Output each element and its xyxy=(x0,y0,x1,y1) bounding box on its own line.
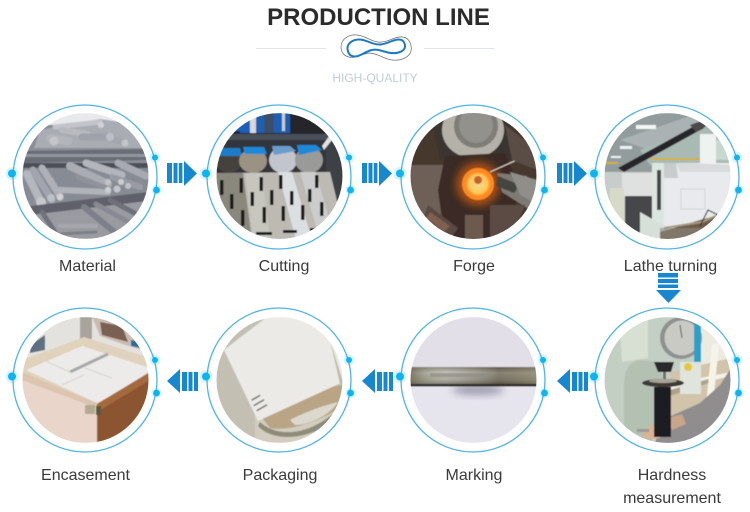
ring xyxy=(401,308,545,452)
label: Encasement xyxy=(41,467,131,484)
photo: wooden crate xyxy=(22,317,150,443)
connector dots xyxy=(200,152,356,195)
ring xyxy=(595,308,739,452)
step 2: cutting xyxy=(200,105,356,275)
step 5: hardness measurement xyxy=(588,308,744,507)
arrow: material to cutting xyxy=(167,161,197,186)
step 7: packaging xyxy=(200,308,356,484)
photo: workshop lathes xyxy=(604,113,731,240)
ring xyxy=(207,308,351,452)
label: Packaging xyxy=(243,467,317,484)
label: Cutting xyxy=(259,258,309,275)
ring xyxy=(595,105,739,249)
arrow: marking to packaging (left) xyxy=(362,369,393,393)
ring xyxy=(207,105,351,249)
label: Hardness xyxy=(638,467,706,484)
photo: cutting machine xyxy=(216,113,343,240)
label: Forge xyxy=(453,258,495,275)
label xyxy=(623,467,721,507)
label: Material xyxy=(59,258,116,275)
title: PRODUCTION LINE xyxy=(267,4,490,31)
label: Marking xyxy=(446,467,502,484)
step 6: marking xyxy=(394,308,550,484)
connector dots xyxy=(6,354,162,398)
step 8: encasement xyxy=(6,308,162,484)
step 3: forge xyxy=(394,102,550,275)
photo: hardness tester xyxy=(604,317,731,445)
photo: steel rods xyxy=(22,113,149,240)
connector dots xyxy=(200,354,356,398)
photo: hot forging xyxy=(410,102,537,240)
connector dots xyxy=(394,354,550,398)
photo: marked steel ring xyxy=(410,317,537,443)
label: measurement xyxy=(623,490,721,507)
emblem: infinity logo with divider lines xyxy=(256,35,494,60)
photo: packaged ring xyxy=(216,317,343,443)
ring xyxy=(13,308,157,452)
arrow: packaging to encasement (left) xyxy=(167,369,198,393)
arrow: cutting to forge xyxy=(362,161,392,186)
arrow: lathe to hardness (down) xyxy=(656,273,681,303)
step 4: lathe turning xyxy=(588,105,744,275)
connector dots xyxy=(588,152,744,195)
label: Lathe turning xyxy=(624,258,717,275)
subtitle: HIGH-QUALITY xyxy=(332,71,418,85)
ring xyxy=(13,105,157,249)
connector dots xyxy=(394,152,550,195)
connector dots xyxy=(588,354,744,398)
arrow: forge to lathe xyxy=(557,161,587,186)
arrow: hardness to marking (left) xyxy=(557,369,588,393)
ring xyxy=(401,105,545,249)
connector dots xyxy=(6,152,162,195)
step 1: material xyxy=(6,105,162,275)
